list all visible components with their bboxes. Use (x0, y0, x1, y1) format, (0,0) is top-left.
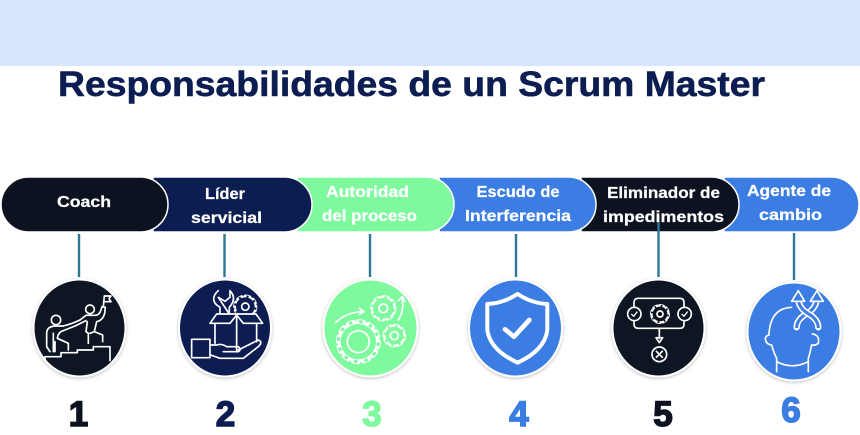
pill 4: Escudo de Interferencia: Escudo de (476, 184, 560, 201)
pill 2: Líder servicial (153, 177, 312, 232)
pill 5: Eliminador de impedimentos: impedimentos (603, 209, 724, 226)
connector 5 (657, 222, 660, 277)
number 1: 1 (69, 395, 88, 434)
top banner (0, 0, 860, 66)
circle badge 1 (34, 280, 126, 376)
icon: gears and arrows (336, 297, 405, 362)
connector 4 (515, 234, 517, 277)
connector 6 (793, 233, 795, 280)
pill 2: Líder servicial: Líder (205, 186, 245, 203)
pill 6: Agente de cambio: Agente de (747, 183, 831, 200)
pill 3: Autoridad del proceso (297, 177, 454, 232)
pill 1: Coach: Coach (57, 194, 111, 211)
pill 5: Eliminador de impedimentos: Eliminador de (607, 185, 720, 202)
number 2: 2 (216, 395, 235, 434)
pill 3: Autoridad del proceso: Autoridad (326, 184, 409, 201)
circle badge 3 (324, 280, 418, 376)
pill 5: Eliminador de impedimentos (581, 177, 739, 232)
circle badge 5 (612, 280, 704, 376)
number 6: 6 (781, 391, 801, 430)
pill 6: Agente de cambio (724, 177, 859, 232)
circle badge 4 (469, 280, 562, 376)
connector 2 (223, 234, 226, 277)
pill 2: Líder servicial: servicial (191, 210, 262, 227)
pill 3: Autoridad del proceso: del proceso (322, 208, 417, 225)
icon: team climbing stairs with flag (45, 296, 111, 361)
circle badge 6 (748, 282, 840, 380)
number 5: 5 (653, 395, 673, 434)
connector 3 (369, 234, 371, 277)
icon: process flow with blocked step (628, 298, 691, 362)
number 4: 4 (509, 395, 529, 434)
circle badge 2 (179, 280, 271, 376)
pill 1: Coach (1, 177, 168, 232)
icon: shield with check (487, 294, 547, 363)
icon: head with crossing arrows (765, 291, 823, 372)
pill 4: Escudo de Interferencia (439, 177, 596, 232)
icon: hand holding box with tools (192, 291, 263, 358)
pill 6: Agente de cambio: cambio (759, 207, 822, 224)
title: Responsabilidades de un Scrum Master (58, 65, 765, 104)
connector 1 (78, 234, 80, 277)
number 3: 3 (362, 395, 382, 434)
pill 4: Escudo de Interferencia: Interferencia (465, 208, 571, 225)
